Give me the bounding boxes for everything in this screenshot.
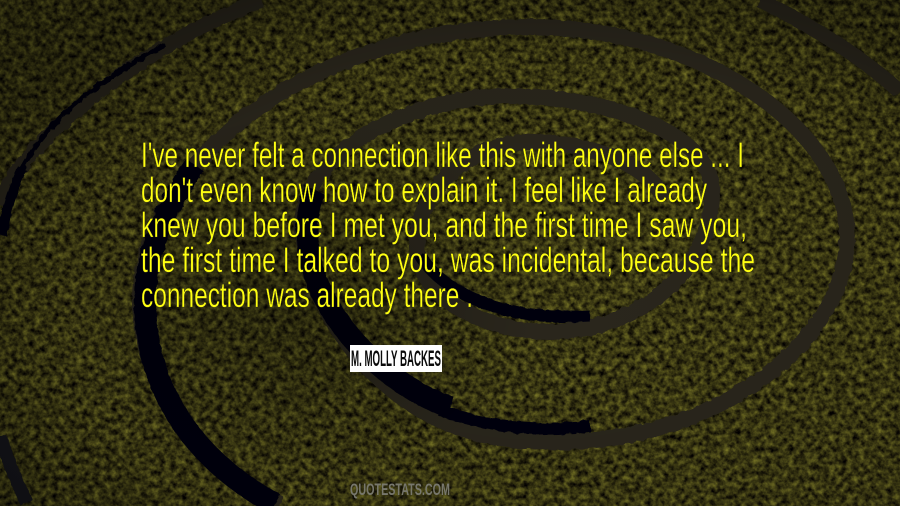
author label — [350, 345, 442, 372]
quote line 5: connection was already there . — [141, 276, 473, 315]
infographic canvas: M. MOLLY BACKES — [351, 346, 441, 371]
quote text — [141, 136, 755, 315]
site watermark: QUOTESTATS.COM — [350, 480, 450, 499]
central shade — [60, 110, 540, 490]
